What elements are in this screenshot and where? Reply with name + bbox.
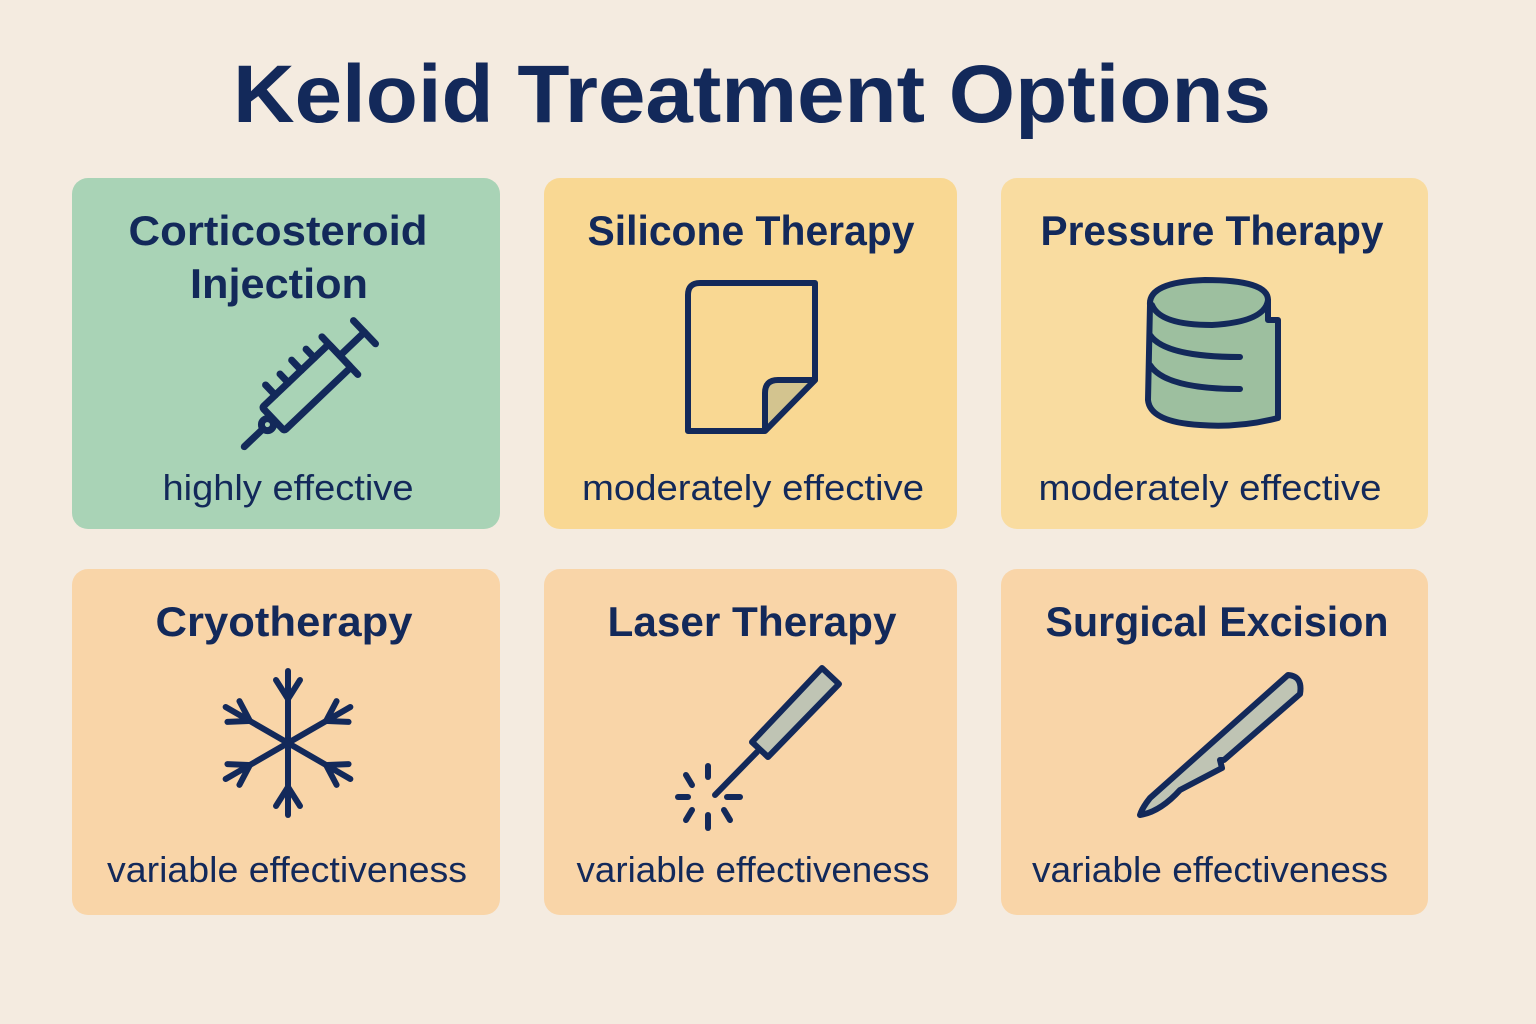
heading: pressure therapy: Pressure Therapy: [1040, 207, 1384, 254]
title: Keloid Treatment Options: [233, 49, 1271, 140]
heading: surgical excision: Surgical Excision: [1046, 598, 1388, 645]
icon: silicone sheet: [688, 283, 815, 431]
icon: syringe: [224, 310, 382, 466]
panel: laser therapy: [544, 569, 957, 915]
text: highly effective: highly effective: [162, 467, 414, 508]
panel: pressure therapy: [1001, 178, 1428, 529]
text: variable effectiveness: variable effectiveness: [576, 849, 930, 890]
icon: bandage roll: [1148, 280, 1278, 426]
text: variable effectiveness: variable effectiveness: [107, 849, 467, 890]
heading: corticosteroid injection: Injection: [190, 260, 368, 307]
panel: silicone therapy: [544, 178, 957, 529]
text: moderately effective: moderately effective: [1038, 467, 1382, 508]
heading: cryotherapy: Cryotherapy: [156, 598, 413, 645]
panel: surgical excision: [1001, 569, 1428, 915]
panel: cryotherapy: [72, 569, 500, 915]
heading: corticosteroid injection: [128, 207, 428, 307]
text: variable effectiveness: variable effectiveness: [1032, 849, 1388, 890]
heading: laser therapy: Laser Therapy: [608, 598, 897, 645]
heading: silicone therapy: Silicone Therapy: [588, 207, 915, 254]
heading: corticosteroid injection: Corticosteroid: [128, 207, 428, 254]
icon: laser pen: [678, 668, 839, 828]
text: moderately effective: moderately effective: [582, 467, 924, 508]
panel: corticosteroid injection: [72, 178, 500, 529]
icon: snowflake: [220, 671, 356, 815]
icon: scalpel: [1140, 675, 1300, 815]
